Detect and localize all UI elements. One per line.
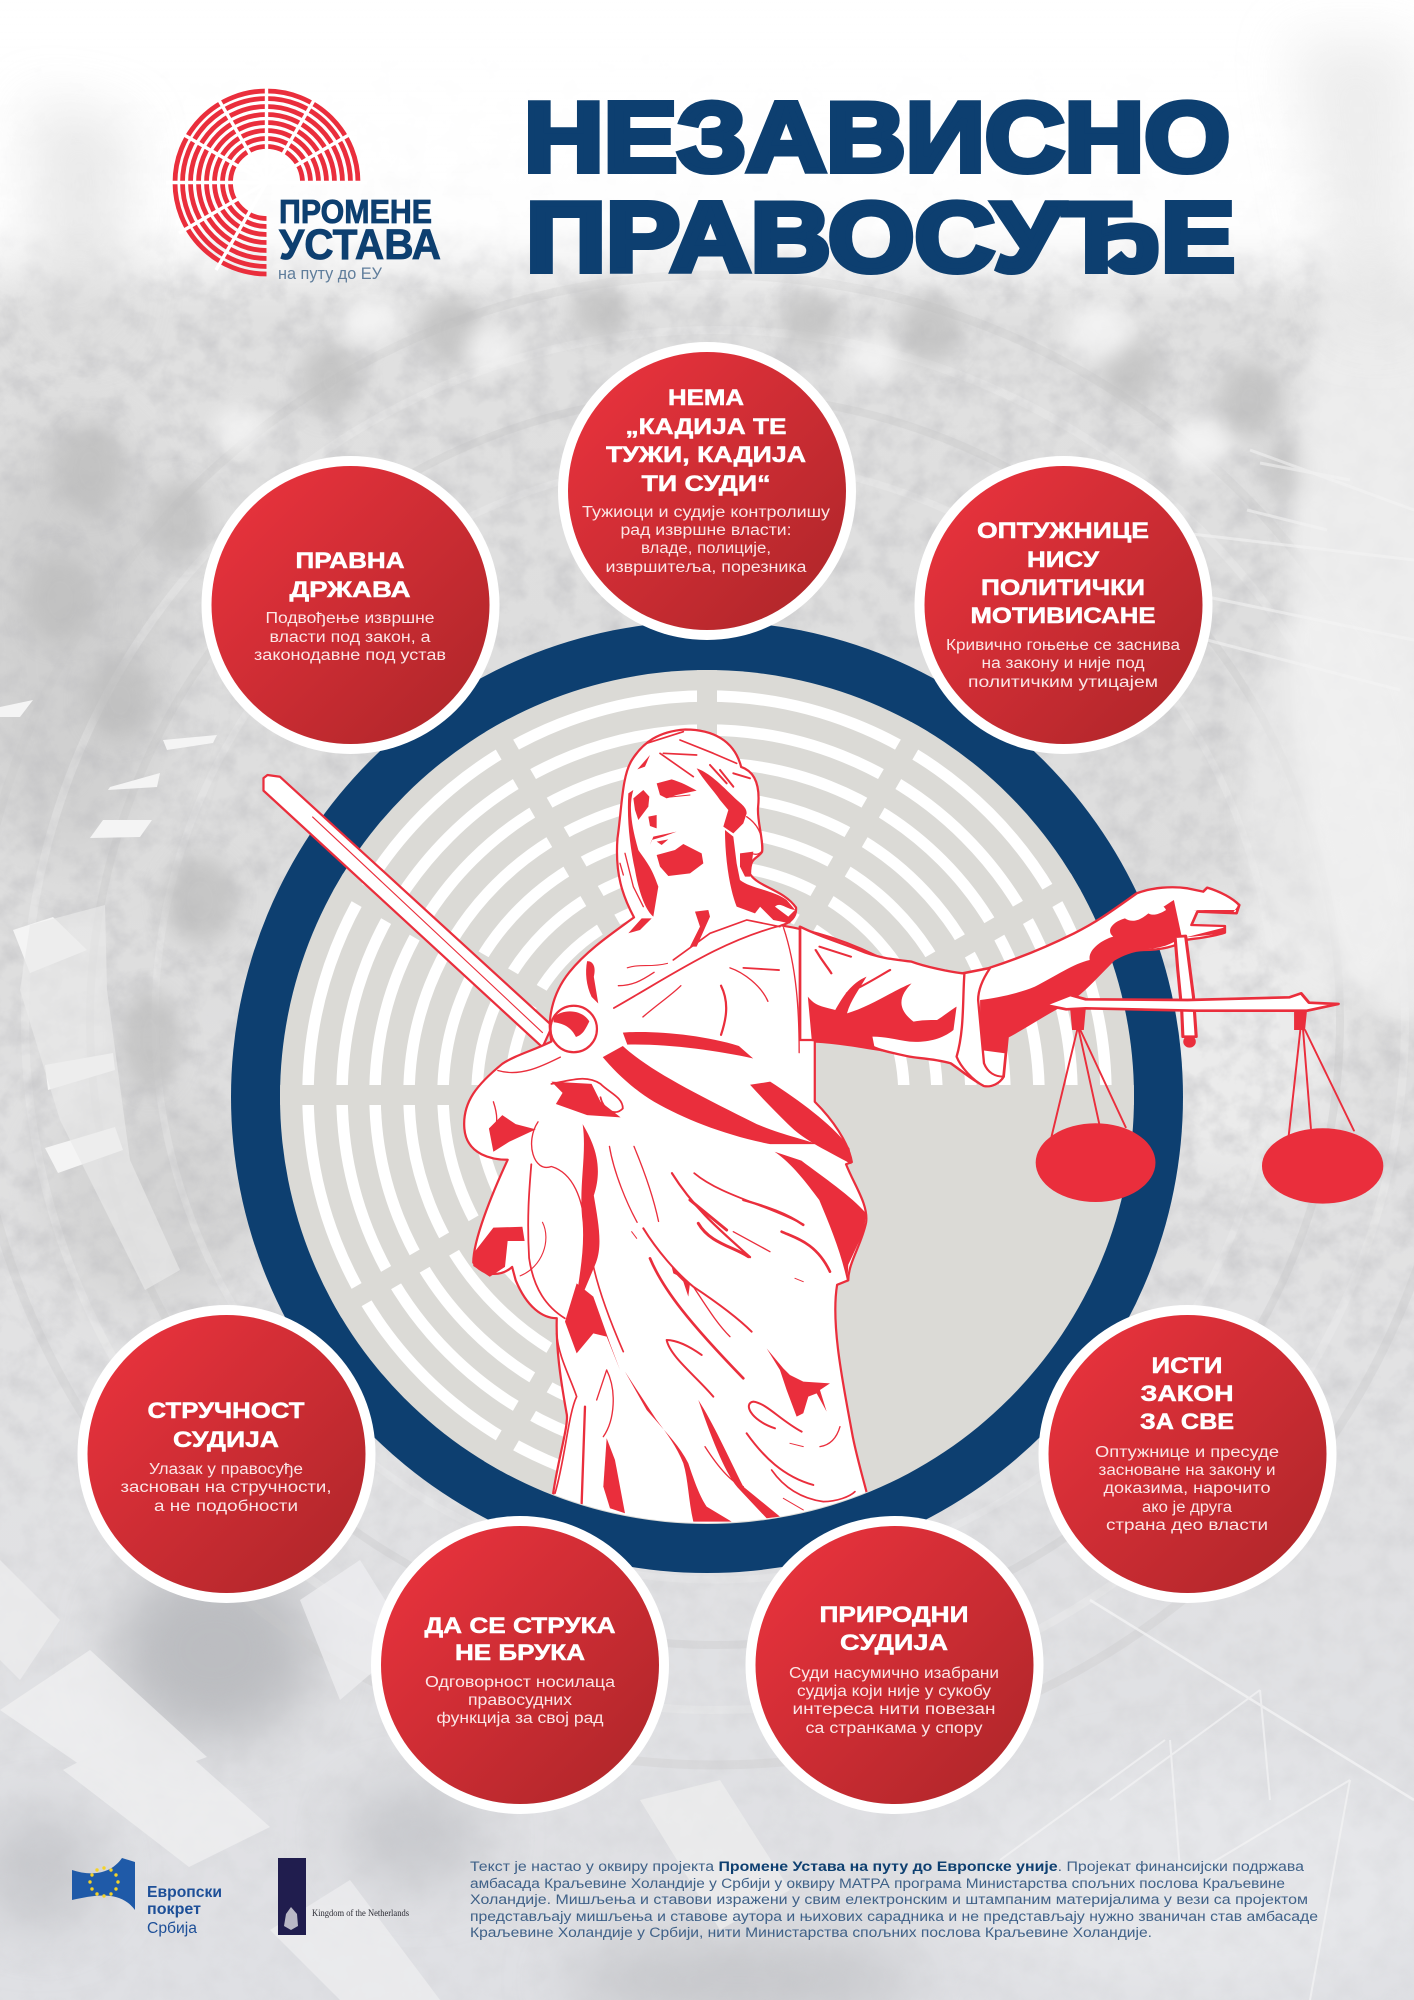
circle: Правна држава — [202, 456, 500, 754]
description: Кривично гоњење се заснива — [946, 637, 1180, 654]
heading — [820, 1602, 968, 1655]
description — [1095, 1444, 1279, 1534]
logo wordmark: на путу до ЕУ — [278, 264, 382, 283]
seated figures in benches — [24, 180, 1414, 1090]
heading: НЕ БРУКА — [455, 1640, 585, 1665]
footer disclaimer text: Холандије. Мишљења и ставови изражени у свим електронским и штампаним материјалима у вези са пројектом — [470, 1892, 1308, 1907]
description: доказима, нарочито — [1104, 1480, 1270, 1497]
lower chamber diagonal panels — [0, 1560, 1414, 2000]
logo emblem: parliament rings — [166, 82, 367, 274]
central navy ring — [231, 621, 1183, 1573]
organisation name: Европски — [147, 1884, 222, 1901]
footer disclaimer text — [470, 1859, 1318, 1940]
heading: НИСУ — [1027, 547, 1099, 572]
circle: Оптужнице нису политички мотивисане — [914, 456, 1212, 754]
circle: Исти закон за све — [1038, 1305, 1336, 1603]
heading: ДА СЕ СТРУКА — [424, 1613, 616, 1638]
description — [946, 637, 1180, 691]
heading — [148, 1398, 305, 1452]
heading: ТУЖИ, КАДИЈА — [606, 442, 806, 467]
footer disclaimer text: представљају мишљења и ставове аутора и њихових сарадника и не представљају нужно званичан став амбасаде — [470, 1909, 1318, 1924]
wordmark: Kingdom of the Netherlands — [312, 1908, 409, 1919]
description: законодавне под устав — [254, 647, 446, 664]
ribbon with crest — [278, 1858, 306, 1935]
heading: ЗА СВЕ — [1140, 1409, 1234, 1434]
title: ПРАВОСУЂЕ — [526, 182, 1235, 292]
description: Тужиоци и судије контролишу — [582, 504, 830, 521]
logo wordmark: УСТАВА — [279, 221, 441, 269]
desk papers left — [0, 700, 217, 1173]
description: извршитеља, порезника — [606, 559, 807, 576]
title: НЕЗАВИСНО — [524, 82, 1230, 192]
description: заснован на стручности, — [120, 1479, 332, 1496]
description — [582, 504, 830, 576]
circle: Нема Кадија те тужи — [558, 342, 856, 640]
statue of Lady Justice with sword and scales — [263, 729, 1383, 1548]
heading: ПРАВНА — [296, 548, 405, 573]
description: функција за свој рад — [436, 1710, 604, 1727]
fold lines on statue — [493, 925, 804, 1318]
description: Улазак у правосуђе — [149, 1461, 303, 1478]
description: страна део власти — [1106, 1517, 1268, 1534]
footer disclaimer text: амбасада Краљевине Холандије у Србији у оквиру МАТРА програма Министарства спољних послова Краљевине — [470, 1876, 1285, 1891]
heading: ЗАКОН — [1140, 1381, 1234, 1406]
description: Оптужнице и пресуде — [1095, 1444, 1279, 1461]
circle: Природни судија — [746, 1516, 1044, 1814]
description: Одговорност носилаца — [425, 1674, 615, 1691]
right benches — [1130, 450, 1414, 690]
description — [789, 1665, 999, 1737]
heading: СТРУЧНОСТ — [148, 1398, 305, 1423]
description: интереса нити повезан — [792, 1701, 996, 1718]
heading: ДРЖАВА — [290, 577, 411, 602]
scale beam — [1045, 936, 1338, 1048]
description: власти под закон, а — [270, 629, 431, 646]
logo: Европски покрет Србија — [72, 1858, 222, 1937]
organisation name: Србија — [147, 1920, 197, 1937]
circle: Стручност судија — [78, 1305, 376, 1603]
heading: СУДИЈА — [173, 1427, 279, 1452]
circle: Да се струка не брука — [371, 1516, 669, 1814]
title — [524, 82, 1235, 292]
central disc with parliament seating pattern — [280, 670, 1134, 1524]
heading: ПРИРОДНИ — [820, 1602, 968, 1627]
heading — [424, 1613, 616, 1665]
heading — [606, 385, 806, 496]
description: политичким утицајем — [968, 674, 1158, 691]
heading: ИСТИ — [1152, 1353, 1222, 1378]
heading: ТИ СУДИ“ — [642, 471, 770, 496]
description: судија који није у сукобу — [797, 1683, 991, 1700]
description: а не подобности — [154, 1498, 298, 1515]
sword — [263, 775, 552, 1047]
description: Подвођење извршне — [266, 610, 434, 627]
description — [254, 610, 446, 664]
description — [425, 1674, 615, 1727]
logo: Promene Ustava — [166, 82, 441, 283]
heading: „КАДИЈА ТЕ — [626, 414, 786, 439]
logo wordmark: ПРОМЕНЕ — [279, 193, 432, 230]
heading — [1140, 1353, 1234, 1434]
sword pommel — [551, 1006, 597, 1052]
footer disclaimer text: Краљевине Холандије у Србији, нити Министарства спољних послова Краљевине Холандије. — [470, 1925, 1152, 1940]
icon: EU flag — [72, 1858, 135, 1910]
heading: СУДИЈА — [840, 1630, 948, 1655]
description: владе, полиције, — [641, 540, 771, 557]
statue body — [463, 728, 884, 1523]
description: на закону и није под — [982, 655, 1144, 672]
description: засноване на закону и — [1098, 1462, 1276, 1479]
description: рад извршне власти: — [620, 522, 792, 539]
lower drapery details — [555, 1200, 855, 1522]
organisation name — [147, 1884, 222, 1937]
description — [120, 1461, 332, 1515]
description: правосудних — [468, 1692, 572, 1709]
organisation name: покрет — [147, 1901, 201, 1918]
description: Суди насумично изабрани — [789, 1665, 999, 1682]
description: ако је друга — [1142, 1499, 1232, 1516]
heading: ПОЛИТИЧКИ — [981, 575, 1145, 600]
logo: Kingdom of the Netherlands — [278, 1858, 409, 1935]
arm — [800, 887, 1239, 1086]
heading — [970, 518, 1156, 628]
description: са странкама у спору — [806, 1720, 983, 1737]
right arm and scales — [800, 887, 1383, 1204]
red shadows on statue — [473, 961, 866, 1318]
logo wordmark — [278, 193, 441, 283]
heading — [290, 548, 411, 602]
footer disclaimer text: Текст је настао у оквиру пројекта Промене Устава на путу до Европске уније . Пројекат финансијски подржава — [470, 1859, 1305, 1874]
scale chains and pans — [1036, 1030, 1383, 1204]
heading: ОПТУЖНИЦЕ — [977, 518, 1149, 543]
statue head details — [620, 732, 797, 960]
heading: МОТИВИСАНЕ — [970, 603, 1156, 628]
heading: НЕМА — [668, 385, 744, 410]
